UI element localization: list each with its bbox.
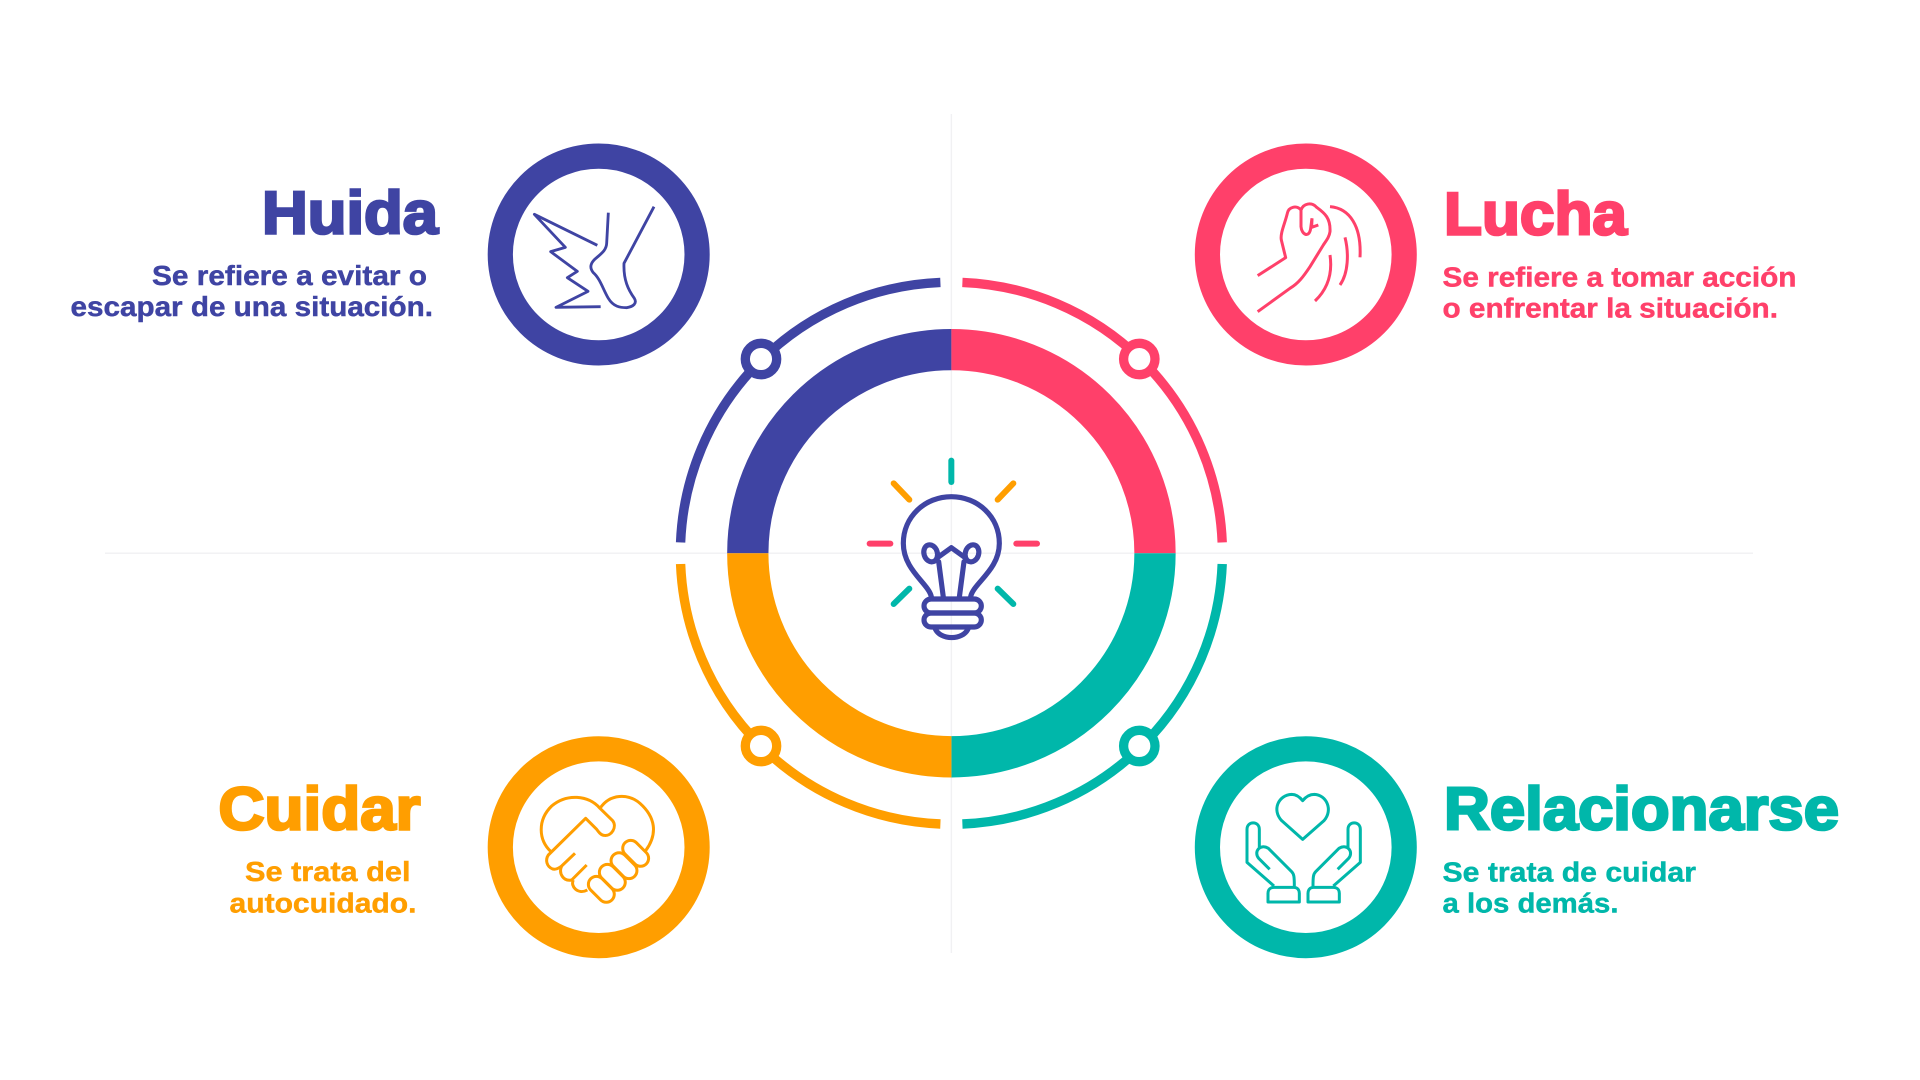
heading: Huida: Huida	[262, 179, 439, 246]
icon badge: Huida	[500, 156, 697, 353]
icon badge: Relacionarse	[1207, 749, 1404, 946]
text: Cuidar description: autocuidado.	[230, 887, 416, 918]
heading: Relacionarse: Relacionarse	[1444, 775, 1839, 842]
text: Relacionarse description: a los demás.	[1442, 888, 1618, 919]
text: Lucha description	[1442, 262, 1796, 324]
text: Cuidar description: Se trata del	[245, 856, 410, 887]
icon: hands holding heart	[1247, 794, 1360, 902]
ring segment: Relacionarse	[951, 553, 1155, 757]
ring segment: Cuidar	[748, 553, 951, 757]
text: Lucha description: Se refiere a tomar acción	[1442, 262, 1796, 292]
icon badge: Cuidar	[500, 749, 697, 946]
panel: Relacionarse	[1207, 749, 1839, 946]
icon badge: Lucha	[1207, 156, 1404, 353]
outer thin arc: Cuidar with node	[681, 564, 940, 824]
text: Huida description: escapar de una situación.	[70, 291, 433, 322]
heading: Lucha: Lucha	[1444, 180, 1628, 248]
icon: foot with impact	[534, 207, 654, 308]
text: Huida description: Se refiere a evitar o	[152, 260, 427, 291]
icon: handshake heart	[541, 796, 653, 906]
panel: Lucha	[1207, 156, 1796, 353]
central donut ring	[748, 350, 1155, 757]
text: Lucha description: o enfrentar la situación.	[1442, 292, 1778, 324]
icon: fist punching	[1258, 204, 1360, 312]
heading: Cuidar: Cuidar	[218, 775, 420, 842]
panel: Cuidar	[218, 749, 697, 946]
text: Huida description	[70, 260, 433, 322]
ring segment: Lucha	[951, 350, 1155, 553]
panel: Huida	[70, 156, 697, 353]
outer thin arc: Huida with node	[681, 282, 940, 542]
ring segment: Huida	[748, 350, 951, 553]
text: Relacionarse description	[1442, 856, 1696, 919]
text: Relacionarse description: Se trata de cuidar	[1442, 856, 1696, 888]
outer thin arc: Relacionarse with node	[962, 564, 1222, 824]
icon: light bulb with rays	[870, 461, 1037, 638]
text: Cuidar description	[230, 856, 416, 918]
outer thin arc: Lucha with node	[962, 282, 1222, 542]
